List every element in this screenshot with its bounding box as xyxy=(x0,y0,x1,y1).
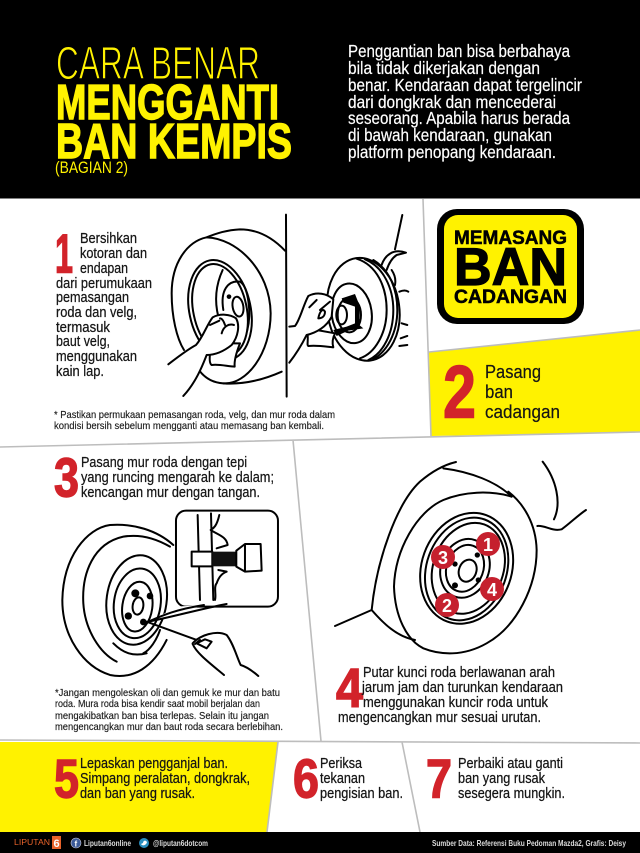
step 5 text: Simpang peralatan, dongkrak, xyxy=(80,770,250,787)
step 1 text: termasuk xyxy=(56,319,110,336)
step 1 note xyxy=(54,410,335,432)
panel: step 3 xyxy=(54,446,283,733)
icon: twitter xyxy=(139,838,149,848)
badge: memasang ban cadangan: CADANGAN xyxy=(454,286,567,308)
panel: step 7 xyxy=(426,748,565,810)
step 3 note: *Jangan mengoleskan oli dan gemuk ke mur dan batu xyxy=(55,688,280,699)
title xyxy=(55,37,292,177)
footer bar xyxy=(0,832,640,853)
step 6 text: Periksa xyxy=(320,755,363,772)
step 4 text xyxy=(338,664,563,726)
number 1: 1 xyxy=(55,222,73,284)
number markers: 4 xyxy=(487,580,497,600)
badge: memasang ban cadangan: MEMASANG xyxy=(454,227,567,249)
title: CARA BENAR xyxy=(56,37,260,89)
icon: facebook xyxy=(71,838,81,848)
step 1 text: Bersihkan xyxy=(80,230,137,247)
step 4 text: menggunakan kuncir roda untuk xyxy=(363,694,548,711)
step 1 text xyxy=(56,230,152,380)
step 6 text: pengisian ban. xyxy=(320,785,403,802)
panel: step 6 xyxy=(293,748,403,810)
badge: memasang ban cadangan: BAN xyxy=(454,238,567,297)
step 3 text: kencangan mur dengan tangan. xyxy=(81,484,260,501)
step 5 text: Lepaskan pengganjal ban. xyxy=(80,755,228,772)
title: BAN KEMPIS xyxy=(56,115,292,169)
logo: liputan6: 6 xyxy=(54,838,60,850)
step 1 text: pemasangan xyxy=(56,289,129,306)
step 1 text: kotoran dan xyxy=(80,245,147,262)
step 7 text: ban yang rusak xyxy=(458,770,545,787)
step 3 text xyxy=(81,454,274,501)
step 1 text: endapan xyxy=(80,260,128,277)
panel: step 1 xyxy=(54,215,408,432)
number 7: 7 xyxy=(426,748,452,810)
step 1 text: menggunakan xyxy=(56,348,137,365)
number markers: 2 xyxy=(442,596,452,616)
step 3 text: Pasang mur roda dengan tepi xyxy=(81,454,247,471)
intro text: bila tidak dikerjakan dengan xyxy=(348,58,540,78)
step 6 text xyxy=(320,755,403,802)
step 1 text: dari perumukaan xyxy=(56,275,152,292)
number 2: 2 xyxy=(443,350,476,434)
step 2 text: Pasang xyxy=(485,361,541,382)
title: (BAGIAN 2) xyxy=(55,158,128,177)
step 7 text: sesegera mungkin. xyxy=(458,785,565,802)
step 5 text: dan ban yang rusak. xyxy=(80,785,195,802)
intro text: platform penopang kendaraan. xyxy=(348,142,556,162)
logo: liputan6 xyxy=(14,836,61,850)
step 5 text xyxy=(80,755,250,802)
icon: facebook: f xyxy=(74,840,78,848)
panel: step 4 xyxy=(335,462,586,726)
step 1 text: baut velg, xyxy=(56,333,110,350)
step 3 note xyxy=(55,688,283,733)
step 3 note: roda. Mura roda bisa kendir saat mobil berjalan dan xyxy=(55,699,260,710)
logo: liputan6: LIPUTAN xyxy=(14,838,50,847)
intro text: benar. Kendaraan dapat tergelincir xyxy=(348,75,582,95)
panel: header xyxy=(0,0,640,198)
badge: memasang ban cadangan xyxy=(437,209,584,324)
step 1 text: roda dan velg, xyxy=(56,304,137,321)
panel: step 2 xyxy=(443,350,560,434)
step 4 text: mengencangkan mur sesuai urutan. xyxy=(338,709,541,726)
step 6 text: tekanan xyxy=(320,770,365,787)
step 4 illustration: tightening order xyxy=(335,462,586,653)
step 4 text: Putar kunci roda berlawanan arah xyxy=(363,664,555,681)
step 2 text: ban xyxy=(485,381,513,402)
number 5: 5 xyxy=(54,748,79,810)
step 3 text: yang runcing mengarah ke dalam; xyxy=(81,469,274,486)
intro text: seseorang. Apabila harus berada xyxy=(348,108,570,128)
step 1 text: kain lap. xyxy=(56,363,104,380)
number 6: 6 xyxy=(293,748,319,810)
number markers xyxy=(431,532,504,617)
step 4 text: jarum jam dan turunkan kendaraan xyxy=(361,679,563,696)
step 3 note: mengakibatkan ban bisa terlepas. Selain itu jangan xyxy=(55,711,269,722)
panel: step 5 xyxy=(54,748,250,810)
number 3: 3 xyxy=(54,446,79,508)
number markers: 3 xyxy=(438,548,448,568)
step 3 note: mengencangkan mur dan baut roda secara berlebihan. xyxy=(55,722,283,733)
intro text: Penggantian ban bisa berbahaya xyxy=(348,41,570,61)
step 7 text xyxy=(458,755,565,802)
panel: step 2 yellow background xyxy=(429,330,640,436)
step 1 illustration: wiping wheel and hub xyxy=(168,215,408,397)
step 1 note: * Pastikan permukaan pemasangan roda, velg, dan mur roda dalam xyxy=(54,410,335,421)
facebook handle: Liputan6online xyxy=(84,838,131,848)
step 2 text: cadangan xyxy=(485,401,560,422)
title: MENGGANTI xyxy=(56,76,279,130)
step 7 text: Perbaiki atau ganti xyxy=(458,755,563,772)
intro text: dari dongkrak dan mencederai xyxy=(348,92,556,112)
intro text xyxy=(348,41,582,162)
step 3 illustration: tightening nut with inset xyxy=(62,511,278,676)
number 4: 4 xyxy=(336,656,363,718)
step 2 text xyxy=(485,361,560,422)
step 1 note: kondisi bersih sebelum mengganti atau memasang ban kembali. xyxy=(54,421,324,432)
twitter handle: @liputan6dotcom xyxy=(153,838,208,848)
intro text: di bawah kendaraan, gunakan xyxy=(348,125,552,145)
number markers: 1 xyxy=(483,535,493,555)
panel: step 5 yellow background xyxy=(0,742,278,832)
